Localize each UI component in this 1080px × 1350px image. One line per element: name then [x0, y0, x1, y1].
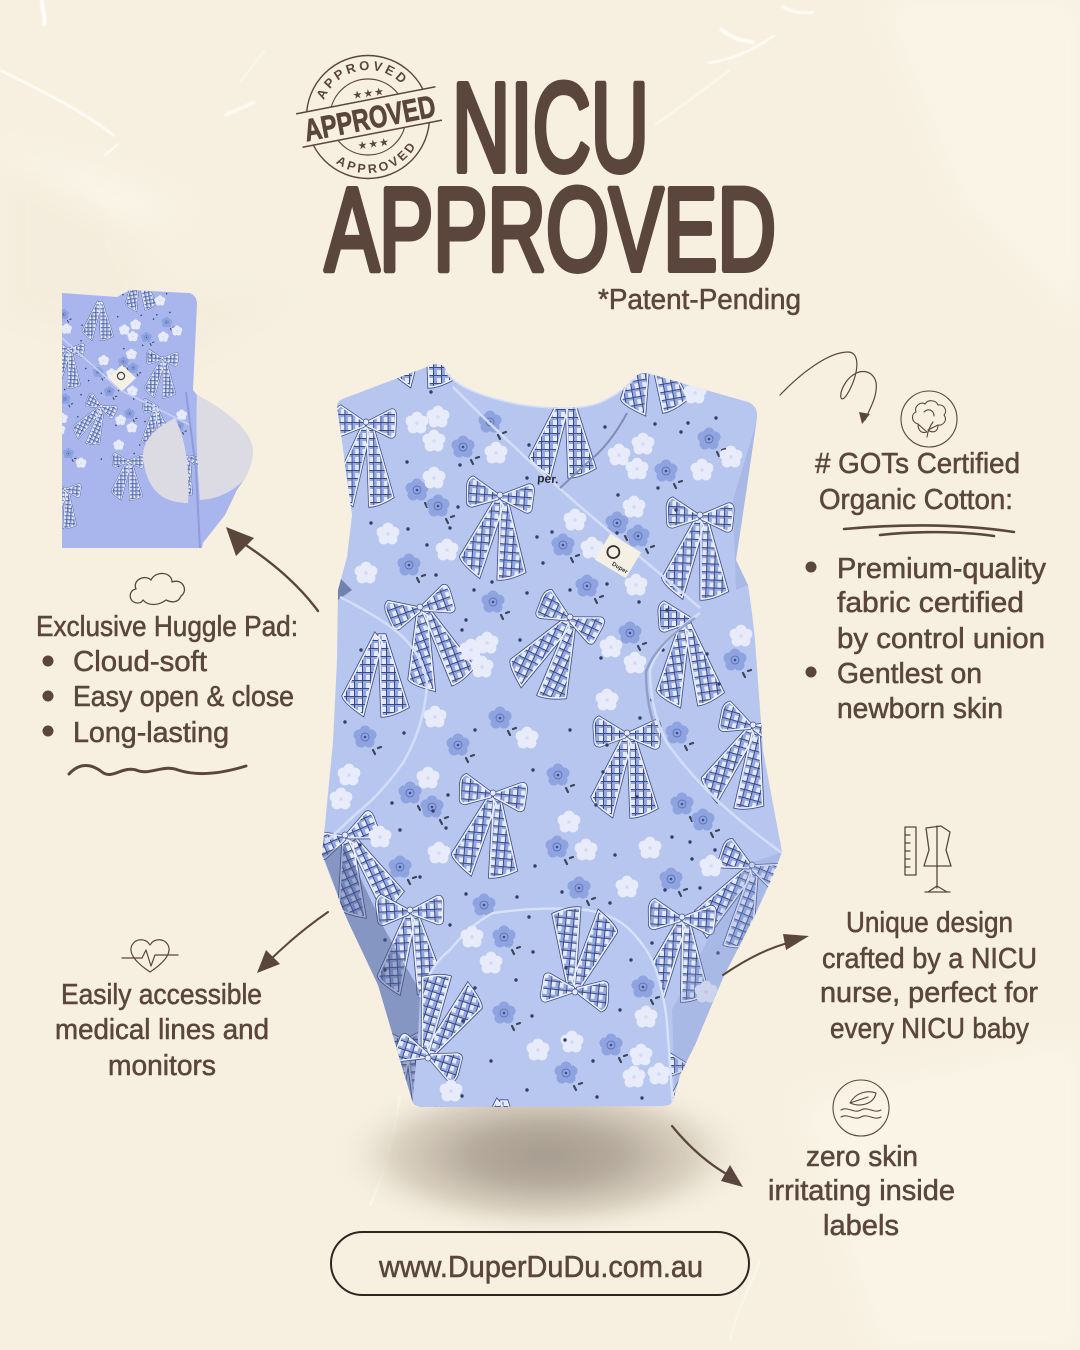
text block: huggle pad — [36, 611, 298, 775]
text block: unique design: every NICU baby — [830, 1013, 1029, 1045]
woven label: Duper — [610, 561, 629, 576]
icon: feather on fabric badge — [833, 1080, 889, 1136]
text block: organic cotton: newborn skin — [837, 693, 1003, 725]
website pill: www.DuperDuDu.com.au — [378, 1249, 703, 1284]
arrow: to huggle pad inset — [226, 527, 318, 611]
text block: huggle pad: Long-lasting — [73, 717, 229, 749]
text block: organic cotton: Gentlest on — [837, 658, 982, 690]
text block: huggle pad: Cloud-soft — [73, 646, 207, 678]
text block: organic cotton: by control union — [837, 623, 1045, 655]
text block: organic cotton: Organic Cotton: — [819, 484, 1013, 516]
garment photo — [322, 364, 782, 1226]
approved stamp: ★★★ — [357, 135, 391, 153]
approved stamp: APPROVED — [318, 61, 406, 100]
ground shadow — [330, 1073, 760, 1237]
wrap seams — [453, 387, 700, 608]
text block: unique design: nurse, perfect for — [820, 977, 1038, 1009]
approved stamp: APPROVED — [301, 89, 438, 148]
arrow: to unique design — [723, 934, 809, 975]
icon: mannequin and ruler — [905, 826, 951, 892]
inset photo: huggle pad — [62, 290, 253, 548]
icon: cotton badge — [901, 391, 957, 447]
website pill — [331, 1232, 749, 1295]
title: NICU — [452, 57, 649, 198]
text block: organic cotton: Premium-quality — [837, 553, 1046, 585]
arrow: to zero skin text — [672, 1126, 743, 1187]
arrow: to medical lines — [257, 912, 328, 973]
text block: unique design: crafted by a NICU — [822, 943, 1037, 975]
text block: organic cotton: # GOTs Certified — [815, 448, 1020, 480]
bodysuit — [322, 364, 782, 1107]
title — [325, 57, 776, 296]
icon: cloud — [130, 573, 184, 604]
title: APPROVED — [325, 164, 776, 296]
text block: medical lines: medical lines and — [55, 1014, 269, 1046]
text block: zero skin irritation: irritating inside — [768, 1175, 955, 1207]
text block: huggle pad: Easy open & close — [73, 681, 294, 713]
icon: heart with pulse — [122, 940, 178, 972]
text block: huggle pad: Exclusive Huggle Pad: — [36, 611, 298, 643]
approved stamp — [296, 54, 442, 180]
text block: organic cotton: fabric certified — [837, 587, 1024, 619]
text block: unique design — [820, 907, 1038, 1045]
text block: unique design: Unique design — [846, 907, 1013, 939]
text block: zero skin irritation — [768, 1141, 955, 1242]
text block: zero skin irritation: labels — [823, 1210, 899, 1242]
approved stamp: APPROVED — [336, 144, 414, 174]
text block: medical lines: monitors — [108, 1050, 216, 1082]
approved stamp: ★★★ — [352, 85, 386, 102]
neck tag text: per. — [537, 471, 559, 486]
text block: zero skin irritation: zero skin — [806, 1141, 918, 1173]
text block: medical lines — [55, 979, 269, 1082]
arrow: squiggle to cotton badge — [780, 352, 876, 424]
patent pending note: *Patent-Pending — [598, 284, 801, 316]
text block: organic cotton — [806, 448, 1046, 725]
bottom flap — [396, 906, 674, 1107]
text block: medical lines: Easily accessible — [61, 979, 262, 1011]
side shadows — [322, 845, 425, 1105]
woven label — [595, 534, 641, 578]
